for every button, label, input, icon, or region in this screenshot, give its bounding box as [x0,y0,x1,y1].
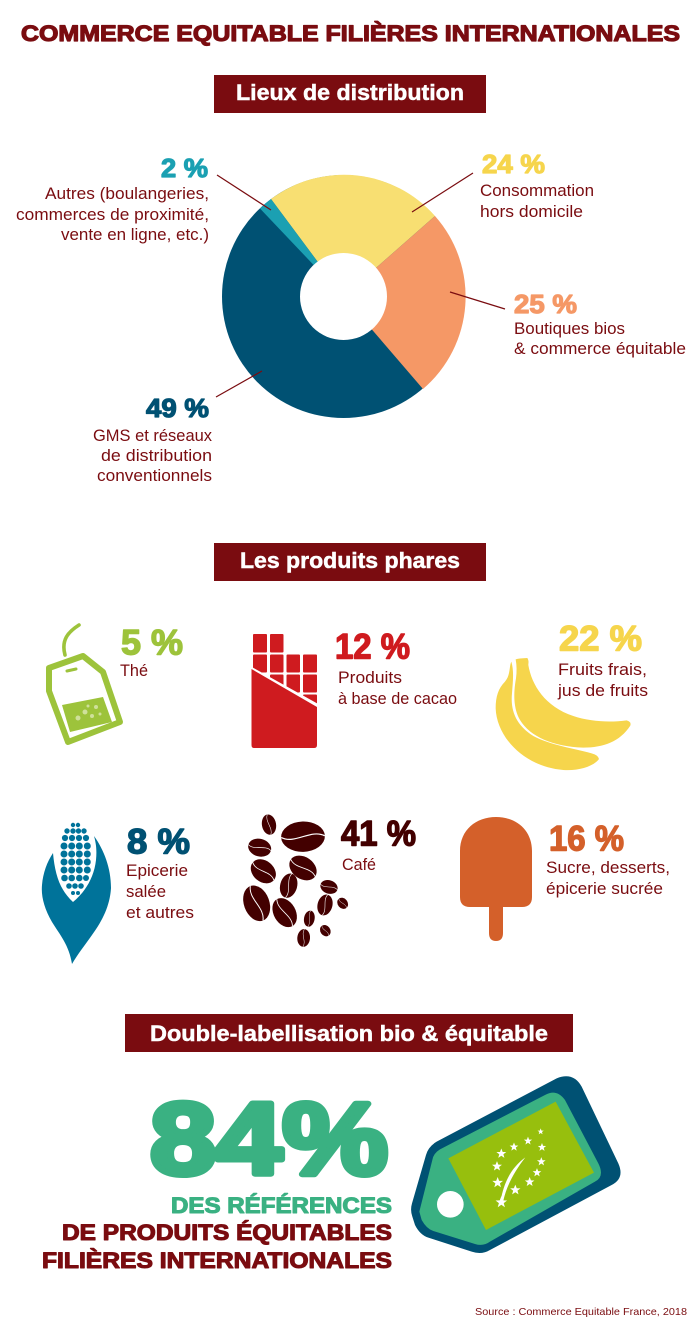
callout: 5 %: 5 % [121,624,183,662]
callout: 24 %: hors domicile [480,203,583,221]
heading: lieux de distribution [214,75,486,113]
callout: 49 %: 49 % [146,393,209,423]
callout: 22 % [557,620,648,700]
callout: 2 %: commerces de proximité, [16,206,209,224]
text block: des références: DE PRODUITS ÉQUITABLES [62,1220,392,1245]
callout: 24 %: Consommation [480,182,594,200]
callout: 41 %: 41 % [341,814,416,854]
donut chart [216,173,505,418]
callout: 2 %: 2 % [161,153,208,183]
callout: 12 %: 12 % [335,628,410,666]
callout: 41 % [341,814,416,874]
callout: 22 %: jus de fruits [557,682,648,700]
icon: tea bag [49,625,120,742]
icon: bananas [496,658,631,770]
callout: 22 %: Fruits frais, [558,661,647,679]
callout: 16 %: épicerie sucrée [546,880,663,898]
callout: 8 %: et autres [126,904,194,922]
callout: 25 %: & commerce équitable [514,340,686,358]
callout: 41 %: Café [342,856,376,874]
callout: 25 % [514,289,686,358]
callout: 12 %: à base de cacao [338,690,457,708]
callout: 5 % [120,624,183,680]
heading: les produits phares: Les produits phares [240,548,460,573]
callout: 49 %: GMS et réseaux [93,427,213,445]
callout: 25 %: 25 % [514,289,577,319]
callout: 12 %: Produits [338,669,402,687]
callout: 5 %: Thé [120,662,148,680]
callout: 25 %: Boutiques bios [514,320,625,338]
callout: 8 %: salée [126,883,166,901]
icon: corn [42,823,111,964]
icon: organic label tag [411,1076,621,1253]
callout: 2 %: Autres (boulangeries, [45,185,209,203]
heading: double-labellisation: Double-labellisation bio & équitable [150,1021,548,1046]
callout: 2 % [16,153,209,244]
big number: 84 %: 84% [150,1082,388,1196]
callout: 49 %: conventionnels [97,467,212,485]
text block: des références [42,1193,392,1273]
callout: 16 % [546,820,670,898]
icon: ice lolly [460,817,532,941]
callout: 49 % [93,393,213,485]
icon: chocolate bar [252,634,317,748]
heading: double-labellisation [125,1014,573,1052]
callout: 2 %: vente en ligne, etc.) [61,226,209,244]
callout: 8 % [126,822,194,922]
callout: 16 %: 16 % [549,820,624,858]
callout: 49 %: de distribution [101,447,212,465]
callout: 12 % [335,628,457,708]
text block: des références: FILIÈRES INTERNATIONALES [42,1248,392,1273]
icon: coffee beans [238,813,350,947]
text block: des références: DES RÉFÉRENCES [171,1193,392,1218]
callout: 24 % [480,149,594,221]
callout: 8 %: Epicerie [126,862,188,880]
callout: 8 %: 8 % [127,822,190,862]
source: Source : Commerce Equitable France, 2018 [475,1306,687,1318]
heading: lieux de distribution: Lieux de distribution [236,80,464,105]
callout: 16 %: Sucre, desserts, [546,859,670,877]
heading: les produits phares [214,543,486,581]
title: COMMERCE EQUITABLE FILIÈRES INTERNATIONALES [21,21,680,46]
callout: 22 %: 22 % [559,620,642,658]
callout: 24 %: 24 % [482,149,545,179]
